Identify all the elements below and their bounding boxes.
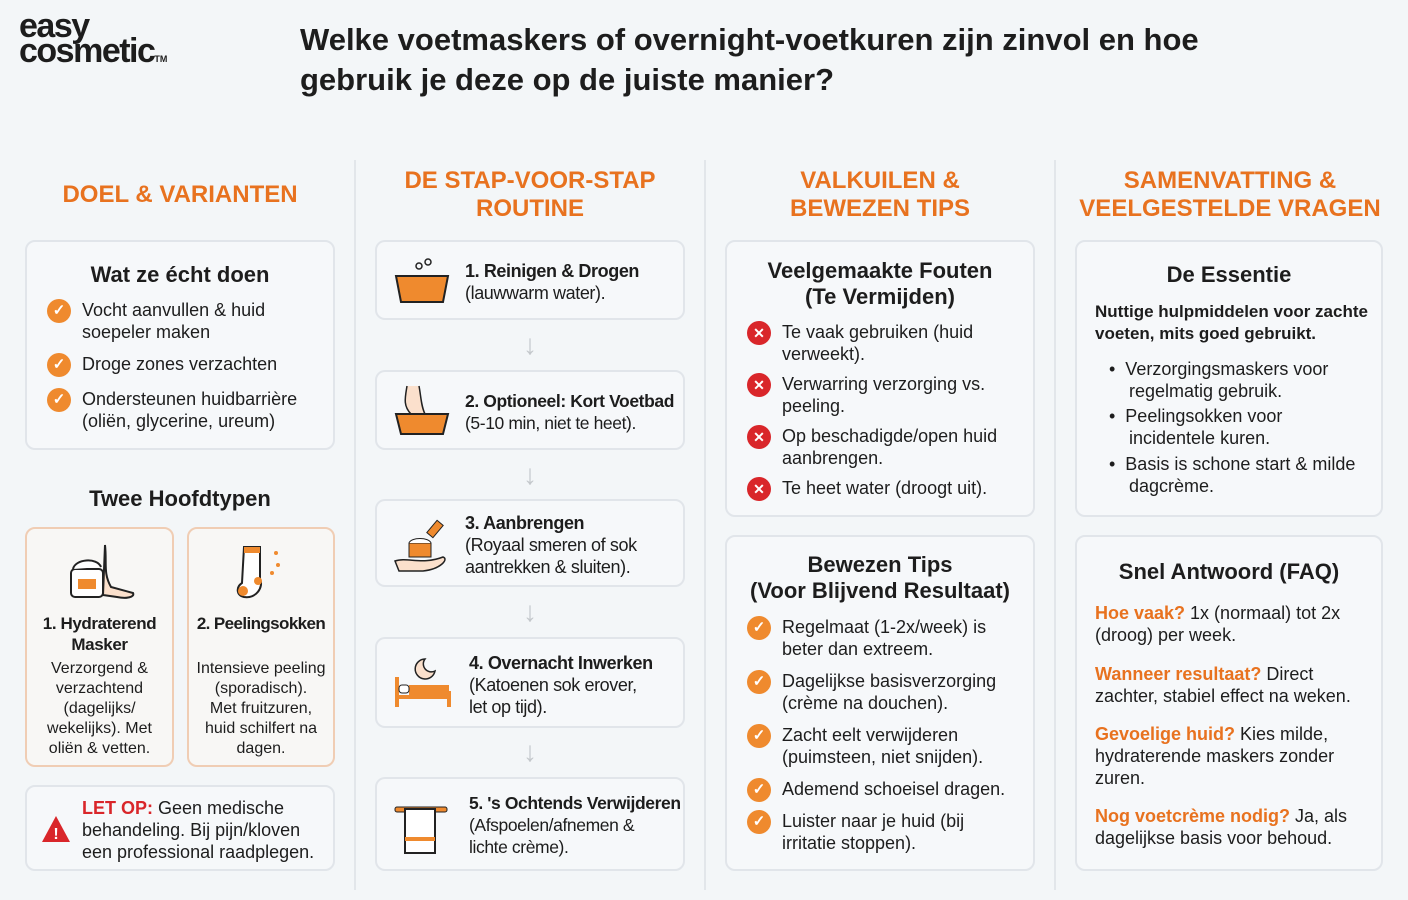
step 3: 3. Aanbrengen: [465, 513, 584, 533]
panel: essentie: De Essentie: [1167, 262, 1291, 287]
arrow: ↓: [523, 596, 537, 627]
step 3: aantrekken & sluiten).: [465, 557, 630, 577]
heading col3: BEWEZEN TIPS: [790, 195, 970, 222]
panel: wat ze echt doen: Wat ze écht doen: [91, 262, 269, 287]
step 2: (5-10 min, niet te heet).: [465, 413, 636, 433]
panel: wat ze echt doen: Ondersteunen huidbarrière: [82, 389, 297, 409]
heading col1: DOEL & VARIANTEN: [62, 181, 298, 208]
panel: essentie: [1075, 240, 1383, 517]
panel: essentie: • Peelingsokken voor: [1109, 406, 1282, 426]
heading col4: [1079, 167, 1381, 222]
panel: fouten: ✕: [753, 377, 765, 393]
card: peelingsokken: (sporadisch).: [215, 680, 307, 697]
arrow: ↓: [523, 736, 537, 767]
step 2: [375, 370, 685, 450]
step 1: 1. Reinigen & Drogen: [465, 261, 639, 281]
panel: fouten: Veelgemaakte Fouten: [768, 258, 992, 283]
card: hydraterend masker: (dagelijks/: [63, 700, 136, 717]
callout: let op: LET OP: Geen medische behandeling. Bij pijn/kloven een professional raadplegen.: [82, 798, 314, 862]
panel: tips: Luister naar je huid (bij: [782, 811, 964, 831]
panel: tips: Bewezen Tips: [807, 552, 953, 577]
card: hydraterend masker: verzachtend: [56, 680, 143, 697]
step 5: (Afspoelen/afnemen &: [469, 815, 634, 835]
icon: jar and foot: [70, 544, 134, 599]
heading twee hoofdtypen: Twee Hoofdtypen: [89, 486, 271, 511]
panel: wat ze echt doen: Vocht aanvullen & huid: [82, 300, 265, 320]
card: peelingsokken: Met fruitzuren,: [210, 700, 312, 717]
panel: tips: ✓: [753, 813, 765, 830]
step 4: (Katoenen sok erover,: [469, 675, 637, 695]
heading col2: [404, 167, 656, 222]
panel: tips: irritatie stoppen).: [782, 833, 916, 853]
panel: tips: [725, 535, 1035, 871]
card: hydraterend masker: 1. Hydraterend: [43, 614, 156, 633]
panel: wat ze echt doen: Droge zones verzachten: [82, 354, 277, 374]
panel: tips: Zacht eelt verwijderen: [782, 725, 958, 745]
heading col3: VALKUILEN &: [800, 167, 960, 194]
panel: tips: Dagelijkse basisverzorging: [782, 671, 996, 691]
step 1: (lauwwarm water).: [465, 283, 605, 303]
panel: FAQ: Gevoelige huid? Kies milde, hydraterende maskers zonder zuren.: [1095, 724, 1334, 788]
card: peelingsokken: 2. Peelingsokken: [197, 614, 325, 633]
heading col4: VEELGESTELDE VRAGEN: [1079, 195, 1381, 222]
panel: fouten: (Te Vermijden): [805, 284, 955, 309]
panel: tips: Ademend schoeisel dragen.: [782, 779, 1005, 799]
step 4: [375, 637, 685, 728]
panel: essentie: regelmatig gebruik.: [1129, 381, 1282, 401]
card: hydraterend masker: Verzorgend &: [51, 660, 148, 677]
panel: essentie: • Verzorgingsmaskers voor: [1109, 359, 1328, 379]
step 1: [375, 240, 685, 320]
card: peelingsokken: [187, 527, 335, 767]
panel: tips: beter dan extreem.: [782, 639, 933, 659]
panel: wat ze echt doen: (oliën, glycerine, ureum): [82, 411, 275, 431]
panel: tips: (Voor Blijvend Resultaat): [750, 578, 1010, 603]
card: peelingsokken: huid schilfert na: [205, 720, 317, 737]
card: hydraterend masker: wekelijks). Met: [47, 720, 152, 737]
step 3: (Royaal smeren of sok: [465, 535, 637, 555]
panel: FAQ: [1075, 535, 1383, 871]
arrow: ↓: [523, 459, 537, 490]
card: hydraterend masker: [25, 527, 174, 767]
title: Welke voetmaskers of overnight-voetkuren zijn zinvol en hoe gebruik je deze op de juiste manier?: [300, 22, 1199, 97]
card: hydraterend masker: oliën & vetten.: [49, 740, 150, 757]
step 5: [375, 777, 685, 871]
logo: cosmeticTM: [19, 32, 167, 70]
icon: warning: !: [53, 826, 59, 843]
panel: tips: (puimsteen, niet snijden).: [782, 747, 983, 767]
step 3: [375, 499, 685, 587]
panel: tips: ✓: [753, 781, 765, 798]
panel: FAQ: Nog voetcrème nodig? Ja, als dagelijkse basis voor behoud.: [1095, 806, 1347, 848]
heading col4: SAMENVATTING &: [1124, 167, 1336, 194]
panel: wat ze echt doen: ✓: [53, 391, 65, 408]
panel: tips: ✓: [753, 727, 765, 744]
panel: wat ze echt doen: ✓: [53, 302, 65, 319]
logo: easy: [19, 7, 89, 45]
panel: fouten: Verwarring verzorging vs.: [782, 374, 985, 394]
panel: tips: Regelmaat (1-2x/week) is: [782, 617, 986, 637]
card: peelingsokken: Intensieve peeling: [196, 660, 325, 677]
icon: sock: [236, 546, 280, 598]
panel: fouten: ✕: [753, 481, 765, 497]
panel: fouten: ✕: [753, 325, 765, 341]
panel: FAQ: Wanneer resultaat? Direct zachter, stabiel effect na weken.: [1095, 664, 1351, 706]
panel: tips: ✓: [753, 673, 765, 690]
step 5: lichte crème).: [469, 837, 568, 857]
panel: essentie: incidentele kuren.: [1129, 428, 1270, 448]
panel: fouten: Op beschadigde/open huid: [782, 426, 997, 446]
panel: fouten: Te vaak gebruiken (huid: [782, 322, 973, 342]
panel: fouten: ✕: [753, 429, 765, 445]
step 5: 5. 's Ochtends Verwijderen: [469, 793, 681, 813]
step 4: let op tijd).: [469, 697, 547, 717]
panel: FAQ: Snel Antwoord (FAQ): [1119, 559, 1339, 584]
step 4: 4. Overnacht Inwerken: [469, 653, 653, 673]
heading col2: ROUTINE: [476, 195, 584, 222]
panel: fouten: peeling.: [782, 396, 845, 416]
panel: fouten: aanbrengen.: [782, 448, 883, 468]
heading col3: [790, 167, 970, 222]
panel: wat ze echt doen: ✓: [53, 356, 65, 373]
panel: tips: ✓: [753, 619, 765, 636]
panel: essentie: dagcrème.: [1129, 476, 1214, 496]
panel: wat ze echt doen: [25, 240, 335, 450]
logo: [19, 7, 167, 70]
panel: fouten: verweekt).: [782, 344, 865, 364]
heading col2: DE STAP-VOOR-STAP: [404, 167, 656, 194]
callout: let op: [25, 785, 335, 871]
card: peelingsokken: dagen.: [237, 740, 285, 757]
panel: essentie: Nuttige hulpmiddelen voor zachte voeten, mits goed gebruikt.: [1095, 302, 1368, 343]
icon: warning: [42, 816, 70, 843]
panel: FAQ: Hoe vaak? 1x (normaal) tot 2x (droog) per week.: [1095, 603, 1340, 645]
arrow: ↓: [523, 329, 537, 360]
panel: fouten: [725, 240, 1035, 517]
panel: tips: (crème na douchen).: [782, 693, 948, 713]
panel: essentie: • Basis is schone start & milde: [1109, 454, 1355, 474]
card: hydraterend masker: Masker: [71, 635, 128, 654]
panel: wat ze echt doen: soepeler maken: [82, 322, 210, 342]
step 2: 2. Optioneel: Kort Voetbad: [465, 391, 674, 411]
panel: fouten: Te heet water (droogt uit).: [782, 478, 987, 498]
